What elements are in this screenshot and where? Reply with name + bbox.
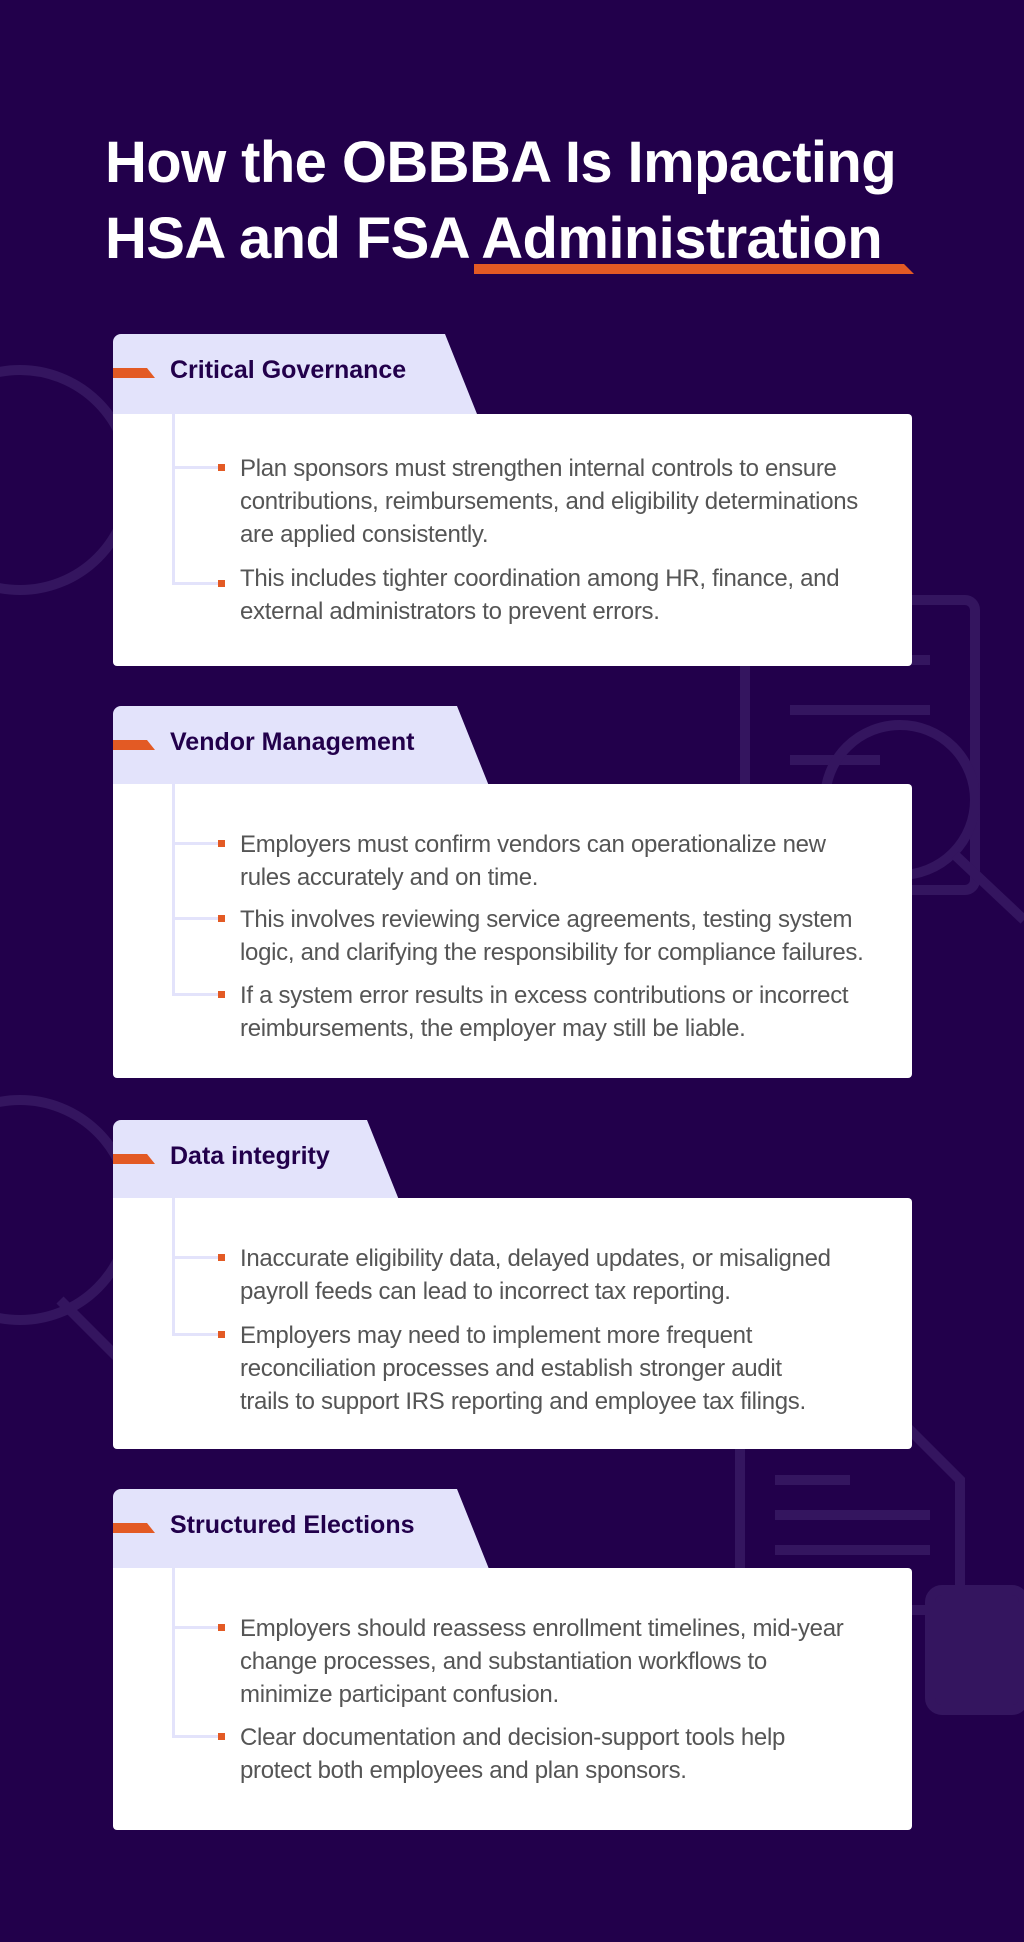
card body: Inaccurate eligibility data, delayed updates, or misaligned <box>240 1245 831 1272</box>
card body: logic, and clarifying the responsibility for compliance failures. <box>240 939 863 966</box>
card body: external administrators to prevent errors. <box>240 598 660 625</box>
card body: contributions, reimbursements, and eligibility determinations <box>240 488 858 515</box>
card body: reimbursements, the employer may still be liable. <box>240 1015 746 1042</box>
title underline <box>474 264 914 274</box>
heading tab: Critical Governance <box>170 356 406 384</box>
card body: Plan sponsors must strengthen internal controls to ensure <box>240 455 837 482</box>
heading tab <box>113 706 489 786</box>
card body: This involves reviewing service agreements, testing system <box>240 906 852 933</box>
panel: Structured Elections <box>113 1489 912 1830</box>
card body: payroll feeds can lead to incorrect tax reporting. <box>240 1278 731 1305</box>
card body: Clear documentation and decision-support tools help <box>240 1724 785 1751</box>
heading tab: Structured Elections <box>170 1511 414 1539</box>
panel: Data integrity <box>113 1120 912 1449</box>
card body: If a system error results in excess contributions or incorrect <box>240 982 848 1009</box>
card body: minimize participant confusion. <box>240 1681 559 1708</box>
card body: are applied consistently. <box>240 521 488 548</box>
card body: change processes, and substantiation workflows to <box>240 1648 767 1675</box>
heading tab <box>113 1489 489 1569</box>
title <box>105 130 896 271</box>
heading tab <box>113 1120 399 1200</box>
card body <box>113 1568 912 1830</box>
panel: Critical Governance <box>113 334 912 666</box>
card body <box>113 414 912 666</box>
card body: This includes tighter coordination among HR, finance, and <box>240 565 839 592</box>
card body: rules accurately and on time. <box>240 864 538 891</box>
card body: trails to support IRS reporting and employee tax filings. <box>240 1388 806 1415</box>
card body: Employers should reassess enrollment timelines, mid-year <box>240 1615 843 1642</box>
card body <box>113 784 912 1078</box>
card body: Employers must confirm vendors can operationalize new <box>240 831 826 858</box>
title: How the OBBBA Is Impacting <box>105 130 896 195</box>
heading tab: Vendor Management <box>170 728 414 756</box>
card body <box>113 1198 912 1449</box>
heading tab <box>113 334 477 414</box>
heading tab: Data integrity <box>170 1142 330 1170</box>
card body: protect both employees and plan sponsors. <box>240 1757 687 1784</box>
panel: Vendor Management <box>113 706 912 1078</box>
title: HSA and FSA Administration <box>105 206 882 271</box>
card body: reconciliation processes and establish stronger audit <box>240 1355 782 1382</box>
card body: Employers may need to implement more frequent <box>240 1322 752 1349</box>
